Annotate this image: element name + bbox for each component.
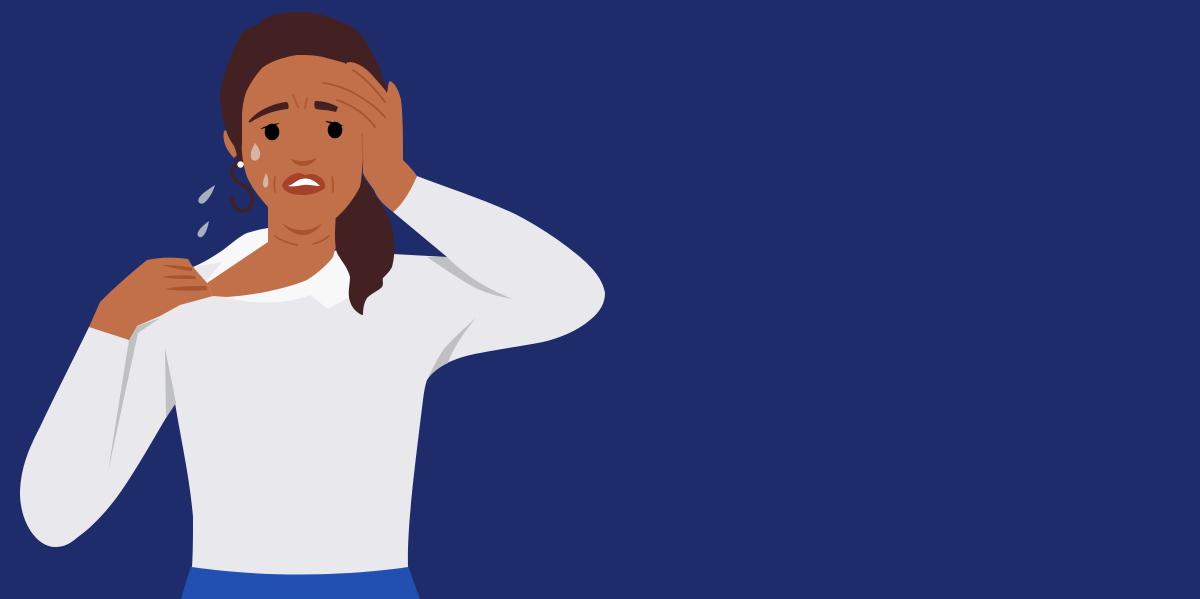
shirt collar: back <box>193 228 272 288</box>
hair: back of head <box>220 12 392 170</box>
eyebrow: right <box>314 101 338 112</box>
sweat drop: lower <box>197 221 209 237</box>
forehead wrinkles <box>293 95 307 108</box>
hand pinching collar <box>89 258 213 340</box>
earring <box>237 161 244 168</box>
tear: upper on cheek <box>251 143 260 161</box>
ponytail <box>335 176 394 315</box>
mouth <box>282 173 325 195</box>
eye: right <box>326 121 344 138</box>
tear: lower on cheek <box>263 173 268 188</box>
fold: right underarm <box>428 318 476 378</box>
shirt collar: front <box>220 250 352 309</box>
face <box>242 55 365 233</box>
chin shadow and neck creases <box>275 223 329 245</box>
hair strand and curl by ear <box>232 146 253 211</box>
finger lines <box>323 70 385 127</box>
smile lines <box>274 177 333 192</box>
shirt collar: inner fold <box>193 262 222 283</box>
fold: upper sleeve <box>427 257 513 299</box>
fold: forearm <box>108 318 160 472</box>
nose <box>290 158 317 166</box>
sweat drop: upper <box>198 185 215 204</box>
trousers <box>181 566 420 599</box>
eye: left <box>260 123 280 140</box>
knuckle lines <box>162 265 207 291</box>
neck and chest <box>207 190 340 297</box>
ear <box>223 128 242 158</box>
eyebrow: left <box>249 102 289 122</box>
hand on forehead <box>322 62 417 212</box>
shirt shadow folds <box>108 257 513 472</box>
fold: left underarm <box>165 348 176 418</box>
shirt: body and both sleeves <box>20 176 605 574</box>
